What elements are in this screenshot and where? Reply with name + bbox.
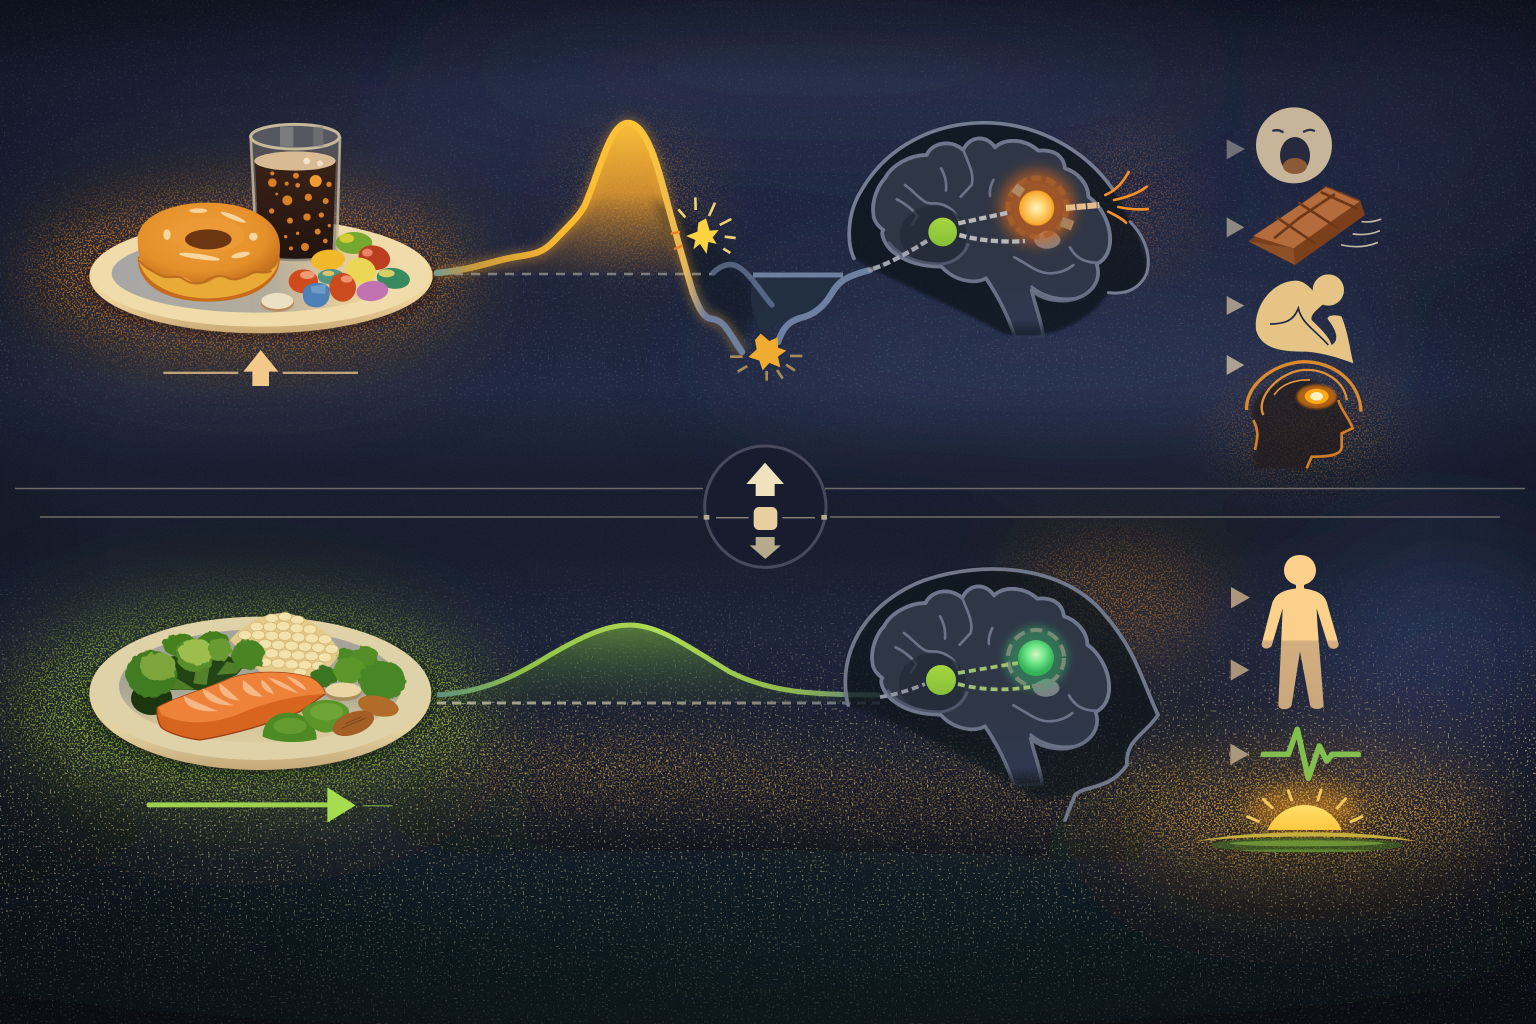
panel: sugary meal [88,124,434,386]
divider lines [15,488,1525,517]
icon: lower burst [730,334,802,381]
head outline [849,123,1113,258]
broccoli right [311,646,406,701]
grain mound [230,612,340,677]
salmon fillet [157,672,325,740]
glowing amygdala [1000,170,1075,245]
broccoli left [126,632,265,715]
icon: head with glowing mind [1247,362,1361,468]
outcome icons: bottom [1193,555,1418,852]
panel: balanced meal [87,612,434,823]
plate [89,617,431,770]
icon: sunrise [1193,787,1418,852]
icon: centre square [754,507,777,530]
calm glow node [1004,626,1068,690]
icon: yawning face [1256,107,1332,183]
candies [261,232,411,312]
forward arrow [147,787,393,823]
plate [89,219,433,333]
symptom icons: top [1227,107,1381,468]
icon: up arrow [746,463,784,496]
icon: down arrow [750,537,781,559]
donut [138,203,280,302]
panel: calm brain [845,569,1158,820]
chart: blood sugar spike and crash [437,123,928,381]
icon: chocolate bar [1248,186,1381,265]
icon: heartbeat line [1263,729,1358,778]
dashed pathways [873,212,1025,269]
spark lines [1105,172,1148,223]
panel: brain with stress response [849,123,1148,337]
icon: fatigued seated person [1256,274,1353,363]
dark head silhouette [849,123,1147,336]
central balance badge [704,446,827,567]
chart: gentle glucose curve [437,625,880,703]
icon: healthy person [1262,555,1339,709]
greens and almonds [263,683,401,742]
up arrow marker [163,350,358,386]
dark head silhouette [845,569,1158,800]
dashed pathways [880,663,1030,697]
dashed link to brain [868,240,928,270]
bright signal bar [1066,205,1099,208]
green node [926,665,956,695]
green node [928,218,957,246]
head outline with face [845,569,1158,820]
icon: upper burst [671,197,736,254]
drinking glass with cola [251,124,340,262]
